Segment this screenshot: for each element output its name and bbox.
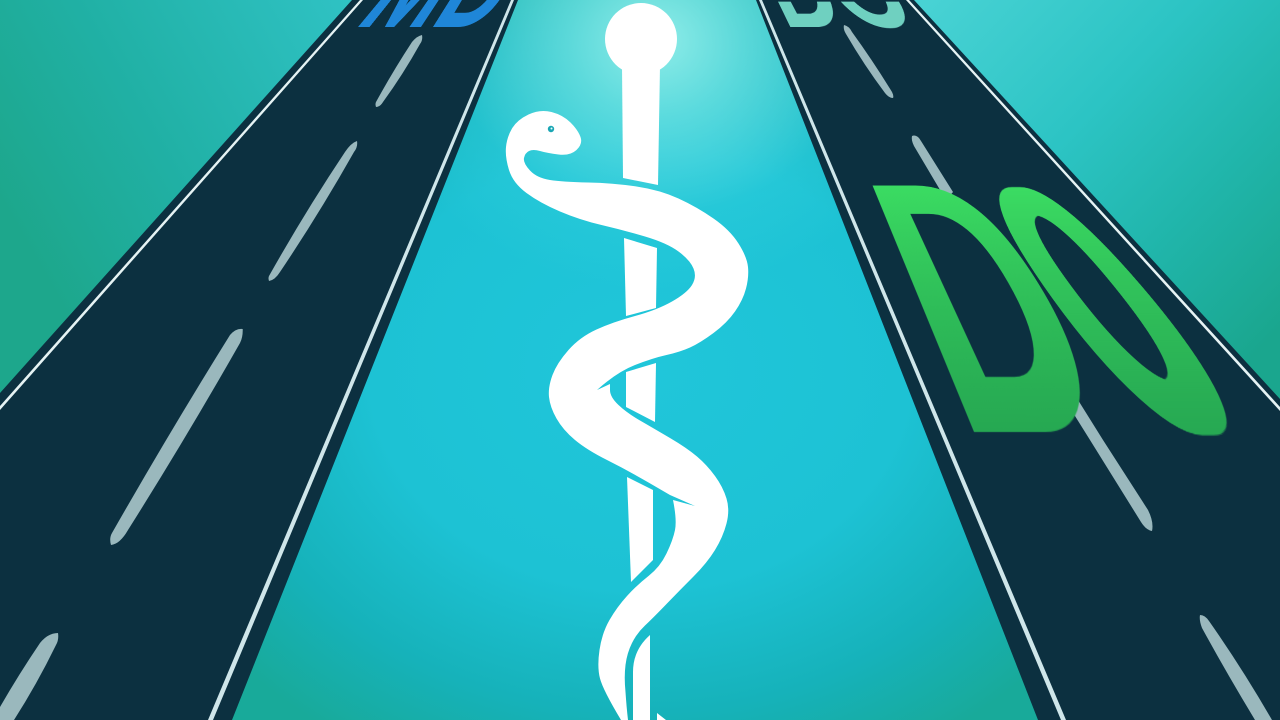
left road xyxy=(0,0,518,720)
right background panel xyxy=(905,0,1280,405)
left road lane dashes xyxy=(0,35,422,720)
staff xyxy=(605,3,677,720)
left background panel xyxy=(0,0,360,400)
right road lane dashes xyxy=(844,25,1272,720)
right road xyxy=(756,0,1280,720)
snake xyxy=(506,111,748,720)
